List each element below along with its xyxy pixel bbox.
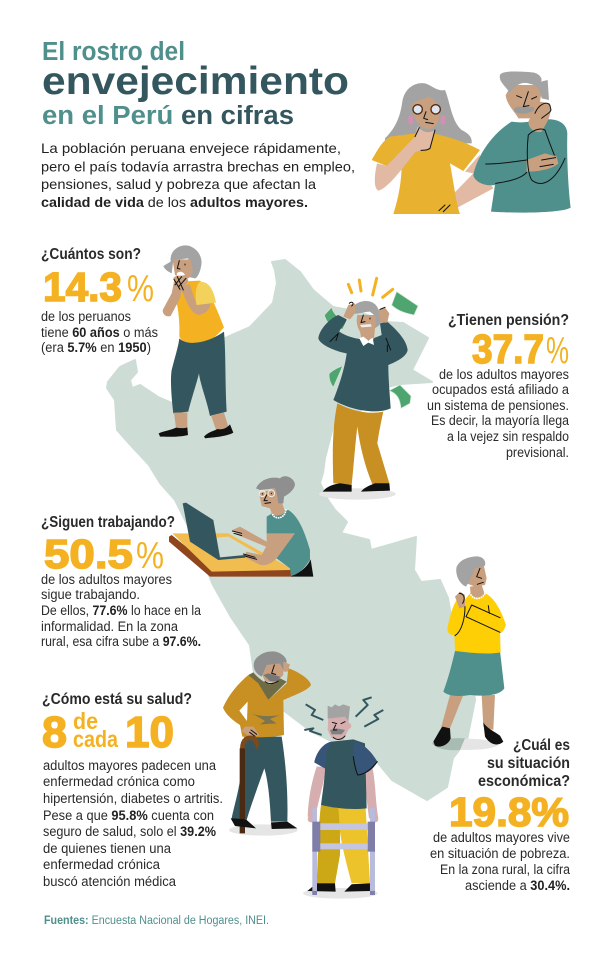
legs (441, 695, 495, 730)
moustache (330, 728, 345, 734)
face (328, 715, 350, 740)
title (42, 38, 349, 130)
shadow (432, 739, 498, 750)
title: El rostro del (42, 38, 185, 66)
map of Peru (107, 260, 475, 800)
panel: work: de los adultos mayores (41, 572, 172, 587)
big number 14.3%: % (127, 268, 154, 310)
panel: health: seguro de salud, solo el 39.2% (43, 824, 216, 839)
collar (359, 337, 374, 346)
illustration: worried woman, how many (159, 245, 233, 438)
hair (163, 245, 202, 278)
intro text: calidad de vida de los adultos mayores. (41, 194, 308, 210)
illustration: elderly couple (372, 72, 571, 214)
trousers (333, 403, 389, 485)
table edge (169, 535, 291, 577)
panel: how many: (era 5.7% en 1950) (41, 340, 151, 355)
neck (470, 585, 485, 598)
panel: health (42, 691, 223, 889)
black skirt (291, 559, 313, 577)
intro text: pensiones, salud y pobreza que afectan la (41, 176, 316, 192)
big number 37.7%: 37.7 (472, 326, 544, 372)
woman right arm (437, 154, 493, 212)
arms (308, 765, 378, 818)
panel: work: ¿Siguen trabajando? (41, 514, 175, 531)
raised hand (283, 662, 290, 672)
calves (174, 412, 228, 432)
collar (248, 672, 287, 700)
shoes (231, 818, 297, 829)
panel: pensions: de los adultos mayores (439, 367, 569, 382)
shadow (319, 488, 396, 500)
shirt (175, 281, 224, 346)
sleeve (196, 282, 216, 305)
jacket fold (252, 713, 280, 724)
panel: health: enfermedad crónica como (43, 774, 195, 789)
trousers (171, 332, 227, 416)
man face and hand (506, 85, 551, 132)
big number 37.7%: % (546, 330, 569, 372)
sweater (447, 593, 506, 653)
panel: work (41, 514, 201, 649)
illustration: worried woman, economy (432, 556, 506, 750)
shoes (433, 722, 503, 747)
panel: pensions: ocupados está afiliado a (432, 382, 569, 397)
panel: pensions (427, 312, 569, 460)
arms (232, 527, 295, 565)
panel: economy: En la zona rural, la cifra (440, 862, 570, 877)
face (173, 259, 193, 279)
face (357, 315, 379, 341)
woman glasses (413, 105, 440, 114)
man hair (500, 72, 549, 100)
hair (352, 301, 384, 327)
intro text: pero el país todavía arrastra brechas en empleo, (41, 158, 355, 174)
face (260, 662, 283, 683)
woman left arm and hand (375, 127, 435, 191)
intro text: La población peruana envejece rápidamente, (41, 140, 341, 156)
panel: work: rural, esa cifra sube a 97.6%. (41, 634, 201, 649)
shoes (159, 424, 233, 438)
big number 8 de cada 10 (42, 708, 174, 757)
panel: pensions: a la vejez sin respaldo (447, 429, 569, 444)
illustration: man with money flying, pensions (318, 278, 418, 500)
big number 50.5% (44, 531, 164, 577)
sources: Fuentes: Encuesta Nacional de Hogares, INEI. (44, 915, 269, 927)
arms (163, 277, 211, 316)
shoes (307, 883, 370, 892)
illustration: man with cane, health (223, 651, 383, 899)
woman shirt (372, 133, 480, 214)
big number 8 de cada 10: cada (73, 726, 118, 752)
shirt (267, 510, 310, 576)
man moustache (514, 107, 534, 114)
panel: how many: ¿Cuántos son? (41, 246, 141, 263)
woman earrings (408, 116, 445, 124)
shirt (314, 739, 367, 809)
panel: health: Pese a que 95.8% cuenta con (43, 808, 214, 823)
cane (242, 738, 257, 833)
woman face (412, 97, 440, 129)
laptop (183, 503, 248, 560)
panel: pensions: Es decir, la mayoría llega (431, 413, 569, 428)
alarm rays (348, 278, 393, 297)
hand on cane (242, 727, 259, 738)
panel: economy: su situación (487, 755, 570, 772)
panel: work: informalidad. En la zona (41, 619, 178, 634)
panel: health: adultos mayores padecen una (43, 758, 216, 773)
panel: how many (41, 246, 158, 355)
big number 19.8%: 19.8% (449, 789, 569, 835)
panel: health: ¿Cómo está su salud? (42, 691, 192, 708)
banknotes (324, 292, 418, 408)
hair (328, 704, 350, 722)
sleeves (314, 742, 377, 775)
panel: work: sigue trabajando. (41, 587, 140, 602)
big number 14.3%: 14.3 (43, 264, 122, 310)
big number 8 de cada 10: de (73, 708, 98, 734)
big number 50.5%: % (136, 535, 164, 577)
panel: how many: de los peruanos (41, 309, 131, 324)
title: envejecimiento (42, 60, 349, 103)
panel: work: De ellos, 77.6% lo hace en la (41, 603, 201, 618)
jacket (223, 668, 311, 737)
hands (455, 592, 465, 608)
trousers right (338, 808, 370, 883)
panel: health: hipertensión, diabetes o artritis. (43, 791, 223, 806)
title: en el Perú en cifras (42, 102, 294, 130)
shadow (303, 888, 378, 899)
beard (263, 673, 280, 682)
panel: economy: ¿Cuál es (513, 737, 570, 754)
hair (256, 476, 295, 503)
shadow (229, 824, 298, 836)
woman hair (385, 83, 472, 143)
moustache (360, 324, 372, 327)
face (463, 563, 487, 587)
big number 8 de cada 10: 8 (42, 708, 67, 757)
face (259, 487, 284, 508)
walker man (303, 697, 383, 899)
panel: health: buscó atención médica (43, 874, 176, 889)
hair (254, 651, 287, 677)
hair (456, 556, 485, 587)
hands (343, 303, 389, 323)
intro text (41, 140, 355, 210)
necklace (272, 509, 286, 518)
walker (312, 808, 375, 895)
panel: pensions: ¿Tienen pensión? (448, 312, 569, 329)
panel: pensions: un sistema de pensiones. (427, 398, 569, 413)
man sweater (473, 119, 571, 213)
panel: health: de quienes tienen una (43, 841, 171, 856)
necklace (471, 593, 485, 598)
illustration: woman at laptop, work (169, 476, 313, 577)
panel: pensions: previsional. (506, 445, 569, 460)
zigzags (304, 697, 383, 735)
hands (308, 816, 378, 822)
panel: economy: en situación de pobreza. (430, 846, 570, 861)
skirt (443, 651, 504, 696)
big number 8 de cada 10: 10 (125, 708, 174, 757)
panel: economy: esconómica? (478, 773, 570, 790)
panel: health: enfermedad crónica (43, 857, 160, 872)
sweater (318, 315, 408, 411)
hands (173, 276, 188, 292)
trousers left (317, 805, 340, 883)
glasses (259, 490, 275, 497)
panel: how many: tiene 60 años o más (41, 325, 158, 340)
panel: economy (430, 737, 570, 893)
man forearm (527, 153, 558, 172)
neck (268, 502, 285, 516)
tissue (177, 272, 185, 277)
panel: economy: de adultos mayores vive (433, 830, 570, 845)
trousers (232, 737, 288, 822)
big number 50.5%: 50.5 (44, 531, 133, 577)
panel: economy: asciende a 30.4%. (465, 878, 570, 893)
table top (172, 533, 291, 572)
shoes (323, 483, 390, 492)
